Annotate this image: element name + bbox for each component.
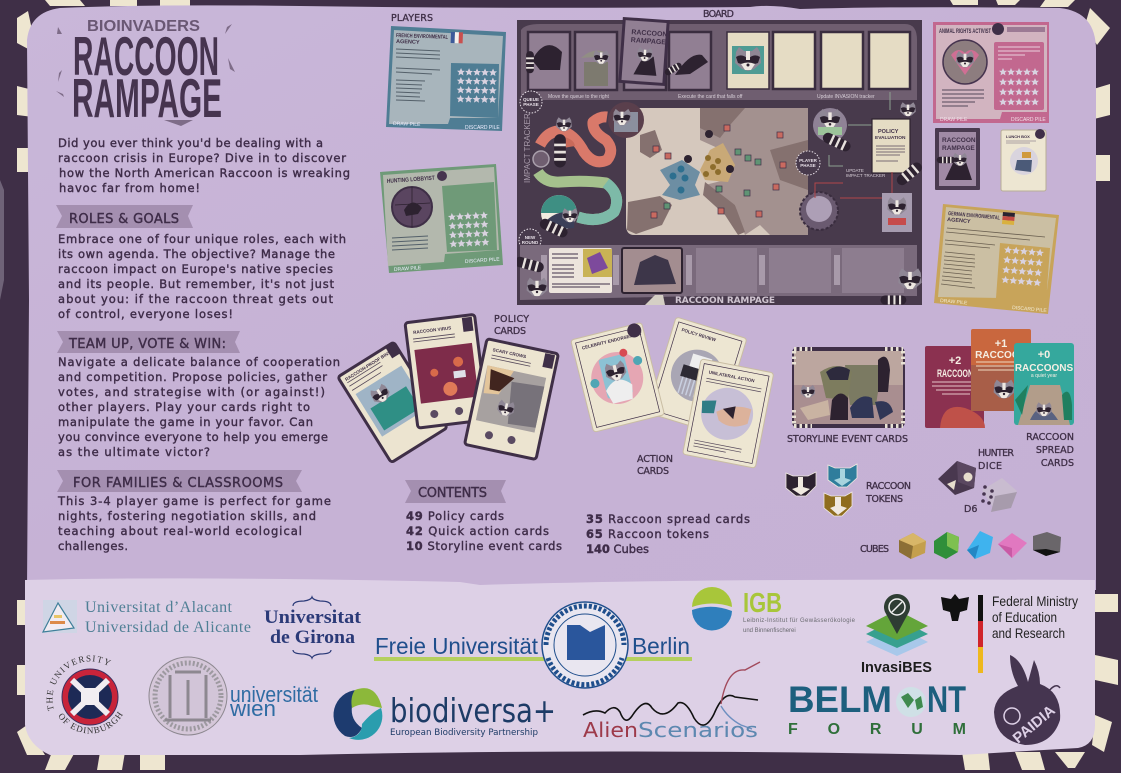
- text block: roles and goals: of control, everyone loses!: [58, 307, 233, 321]
- label: action cards: CARDS: [637, 466, 669, 477]
- board: policy queue strip: [521, 19, 917, 100]
- heading: team up, vote and win: [57, 331, 240, 353]
- logo: Federal Ministry of Education and Research: Federal Ministry: [992, 593, 1078, 609]
- logo: Universitat de Girona: Universitat: [264, 607, 362, 628]
- logo: Paidia: [994, 655, 1060, 747]
- text block: roles and goals: about you: if the raccoon threat gets out: [58, 292, 333, 306]
- player card: Animal Rights Activist: DRAW PILE: [940, 117, 968, 123]
- logo: IGB: Leibniz-Institut für Gewässerökologie: [743, 618, 856, 624]
- card back: Raccoon Rampage: RACCOON: [942, 137, 976, 144]
- text block: introduction: how the North American Raccoon is wreaking: [59, 166, 350, 180]
- player card: Animal Rights Activist: ANIMAL RIGHTS ACTIVIST: [939, 29, 991, 35]
- d6 die: [981, 478, 1017, 512]
- text block: roles and goals: Embrace one of four unique roles, each with: [58, 232, 346, 246]
- player card: German Environmental Agency: [934, 204, 1059, 314]
- logo: University of Vienna seal and wordmark: wien: [229, 696, 276, 721]
- hunter dice: [938, 461, 976, 495]
- action cards group: [570, 317, 774, 468]
- board: policy evaluation and flows: POLICY: [878, 129, 899, 135]
- label: policy cards: CARDS: [494, 326, 526, 337]
- player card: French Environmental Agency: AGENCY: [396, 39, 420, 46]
- spread card: +1: [971, 329, 1031, 411]
- heading: team up, vote and win: TEAM UP, VOTE & WIN:: [68, 337, 226, 352]
- player card: German Environmental Agency: DISCARD PILE: [1012, 305, 1048, 314]
- text block: team up, vote and win: [58, 355, 340, 459]
- heading: contents: [405, 480, 506, 503]
- list: contents right: [586, 512, 750, 556]
- action card: policy review: [647, 317, 747, 434]
- logo: Belmont Forum: [788, 679, 966, 738]
- board: Europe map: [626, 108, 808, 235]
- player card: French Environmental Agency: FRENCH ENVIRONMENTAL: [396, 33, 449, 41]
- logo: Paidia: PAIDIA: [1010, 702, 1059, 747]
- list: contents left: [406, 509, 562, 553]
- policy cards group: [338, 314, 558, 463]
- title logo: RACCOON: [73, 25, 219, 87]
- label: hunter dice: HUNTER: [978, 448, 1014, 459]
- logo: Freie Universität Berlin: Freie Universität: [375, 633, 539, 659]
- text block: for families and classrooms: This 3-4 player game is perfect for game: [57, 494, 331, 508]
- action card: unilateral action: [683, 359, 774, 468]
- storyline event card: [792, 347, 905, 428]
- action card: unilateral action: UNILATERAL ACTION: [708, 370, 755, 383]
- label: policy cards: [494, 314, 529, 337]
- text block: team up, vote and win: Navigate a delicate balance of cooperation: [58, 355, 340, 369]
- policy card: raccoon proof bins: RACCOON-PROOF BINS: [344, 350, 392, 382]
- list: contents right: 35 Raccoon spread cards: [586, 512, 750, 526]
- text block: for families and classrooms: nights, fostering negotiation skills, and: [58, 509, 316, 523]
- heading: for families and classrooms: FOR FAMILIES & CLASSROOMS: [73, 476, 283, 491]
- game board: [517, 19, 922, 306]
- player card: Animal Rights Activist: DISCARD PILE: [1011, 117, 1046, 123]
- spread card: +1: RACCOON: [975, 350, 1027, 361]
- logo: AlienScenarios: [583, 662, 760, 742]
- board: phase badges: PHASE: [523, 102, 539, 107]
- board: phase badges: [519, 91, 820, 251]
- logo: biodiversa+: biodiversa+: [390, 691, 556, 730]
- text block: team up, vote and win: manipulate the game in your favor. Can: [58, 415, 313, 429]
- action card: policy review: POLICY REVIEW: [681, 327, 717, 343]
- list: contents left: 49 Policy cards: [406, 509, 504, 523]
- logo: Federal Ministry of Education and Research: [941, 593, 1078, 673]
- player card: French Environmental Agency: [386, 26, 506, 131]
- logo: Federal Ministry of Education and Research: of Education: [992, 609, 1057, 625]
- list: contents left: 42 Quick action cards: [406, 524, 549, 538]
- logo: Freie Universität Berlin: [374, 602, 692, 688]
- cubes row: [899, 531, 1061, 559]
- label: players: PLAYERS: [391, 13, 433, 24]
- board: policy queue strip: RAMPAGE: [631, 37, 667, 47]
- board: phase badges: NEW: [525, 235, 536, 240]
- logo: Freie Universität Berlin: Berlin: [632, 633, 690, 659]
- spread card: +0: [1014, 343, 1074, 425]
- heading: for families and classrooms: [57, 470, 302, 492]
- text block: roles and goals: its own agenda. The objective? Manage the: [58, 247, 335, 261]
- card back: Raccoon Rampage: RAMPAGE: [942, 145, 975, 152]
- logo: IGB: und Binnenfischerei: [743, 628, 796, 634]
- board: policy evaluation and flows: [800, 92, 917, 232]
- player card: German Environmental Agency: AGENCY: [947, 217, 971, 225]
- spread card: +0: a quiet year: [1031, 373, 1057, 379]
- policy card: raccoon virus: [405, 314, 487, 428]
- board: policy queue strip: Update INVASION tracker: [817, 94, 875, 100]
- board: policy evaluation and flows: EVALUATION: [875, 135, 906, 141]
- label: raccoon tokens: TOKENS: [865, 494, 903, 505]
- logo: biodiversa+: European Biodiversity Partnership: [390, 728, 538, 738]
- label: raccoon tokens: RACCOON: [866, 481, 911, 492]
- heading: contents: CONTENTS: [418, 486, 487, 501]
- list: contents left: 10 Storyline event cards: [406, 539, 562, 553]
- board: policy evaluation and flows: IMPACT TRACKER: [846, 173, 886, 178]
- action card: celebrity endorsement: [570, 321, 665, 432]
- board: policy evaluation and flows: UPDATE: [846, 168, 864, 173]
- logo: InvasiBES: [861, 594, 932, 676]
- list: contents right: 140 Cubes: [586, 542, 649, 556]
- text block: roles and goals: raccoon impact on Europe's native species: [58, 262, 333, 276]
- text block: for families and classrooms: challenges.: [58, 539, 128, 553]
- text block: introduction: raccoon crisis in Europe? Dive in to discover: [58, 151, 346, 165]
- title logo: BIOINVADERS: [87, 18, 200, 35]
- card back: Raccoon Rampage: [935, 128, 980, 190]
- logo: University of Vienna seal and wordmark: [149, 657, 318, 735]
- board: phase badges: PLAYER: [799, 158, 818, 163]
- raccoon tokens: [786, 464, 857, 516]
- player card: German Environmental Agency: DRAW PILE: [940, 298, 968, 306]
- board: storyline strip: [520, 245, 922, 306]
- text block: team up, vote and win: as the ultimate victor?: [58, 445, 210, 459]
- text block: introduction: havoc far from home!: [59, 181, 200, 195]
- label: board: BOARD: [703, 9, 734, 20]
- text block: for families and classrooms: [57, 494, 331, 553]
- logo: InvasiBES: InvasiBES: [861, 659, 932, 676]
- logo: AlienScenarios: Alien: [583, 718, 638, 742]
- board: phase badges: PHASE: [800, 163, 816, 168]
- label: storyline event cards: STORYLINE EVENT CARDS: [787, 434, 908, 445]
- raccoon spread cards: [925, 329, 1074, 428]
- label: d6: D6: [964, 504, 977, 515]
- board: phase badges: QUEUE: [523, 97, 539, 102]
- logo: Universitat d'Alacant: Universitat d’Alacant: [85, 599, 233, 616]
- label: action cards: ACTION: [637, 454, 673, 465]
- label: cubes: CUBES: [860, 544, 889, 555]
- label: raccoon spread cards: RACCOON: [1026, 432, 1074, 443]
- board: impact tracker path: IMPACT TRACKER: [523, 113, 532, 183]
- text block: introduction: [58, 136, 350, 195]
- spread card: +2: +2: [949, 355, 961, 367]
- title logo: RAMPAGE: [72, 67, 222, 129]
- title logo: [56, 18, 235, 129]
- player card: Hunting Lobbyist: HUNTING LOBBYIST: [387, 176, 435, 185]
- text block: roles and goals: and its people. But remember, it's not just: [58, 277, 334, 291]
- text block: introduction: Did you ever think you'd be dealing with a: [58, 136, 323, 150]
- label: hunter dice: DICE: [978, 461, 1002, 472]
- spread card: +1: +1: [995, 338, 1007, 350]
- text block: team up, vote and win: and competition. Propose policies, gather: [58, 370, 327, 384]
- player card: French Environmental Agency: DRAW PILE: [393, 121, 421, 128]
- logo: Universitat d'Alacant: Universidad de Alicante: [85, 619, 251, 636]
- policy card: scary crows: SCARY CROWS: [492, 347, 527, 359]
- panel: footer sponsors: [25, 578, 1095, 755]
- logo: IGB: [692, 587, 856, 634]
- card: small action card: [1001, 129, 1046, 191]
- player card: Hunting Lobbyist: [380, 164, 503, 273]
- spread card: +2: [925, 346, 985, 428]
- logo: University of Edinburgh: OF EDINBURGH: [59, 711, 123, 734]
- label: action cards: [637, 454, 673, 477]
- logo: Belmont Forum: NT: [927, 679, 966, 720]
- board: policy queue strip: Move the queue to the right: [548, 94, 609, 100]
- player card: Animal Rights Activist: [933, 22, 1049, 123]
- label: raccoon spread cards: CARDS: [1041, 458, 1074, 469]
- spread card: +0: RACCOONS: [1015, 363, 1073, 374]
- text block: roles and goals: [58, 232, 346, 321]
- logo: Universitat de Girona: [264, 597, 362, 658]
- board: policy queue strip: RACCOON: [631, 29, 668, 39]
- board: policy queue strip: Execute the card that falls off: [678, 94, 743, 100]
- text block: for families and classrooms: teaching about real-world ecological: [58, 524, 302, 538]
- player card: Hunting Lobbyist: DRAW PILE: [394, 265, 422, 273]
- text block: team up, vote and win: you convince everyone to help you emerge: [58, 430, 328, 444]
- label: hunter dice: [978, 448, 1014, 472]
- logo: University of Edinburgh: [46, 656, 123, 734]
- action card: celebrity endorsement: CELEBRITY ENDORSEMENT: [581, 331, 643, 351]
- policy card: raccoon proof bins: [338, 342, 447, 463]
- logo: Universitat d'Alacant: [43, 599, 251, 636]
- heading: roles and goals: [56, 205, 193, 228]
- label: raccoon spread cards: [1026, 432, 1074, 469]
- board: phase badges: ROUND: [522, 240, 539, 245]
- spread card: +0: +0: [1038, 349, 1050, 361]
- text block: team up, vote and win: votes, and strategise with (or against!): [58, 385, 325, 399]
- spread card: +2: RACCOON: [937, 368, 973, 380]
- panel: main lilac: [27, 5, 1096, 590]
- label: raccoon tokens: [865, 481, 911, 505]
- logo: IGB: IGB: [743, 587, 782, 618]
- board: impact tracker path: [523, 113, 617, 220]
- logo: Universitat de Girona: de Girona: [270, 627, 356, 648]
- logo: AlienScenarios: Scenarios: [638, 718, 758, 742]
- logo: Federal Ministry of Education and Research: and Research: [992, 625, 1065, 641]
- heading: roles and goals: ROLES & GOALS: [69, 212, 179, 227]
- logo: University of Vienna seal and wordmark: universität: [230, 682, 318, 707]
- text block: team up, vote and win: other players. Play your cards right to: [58, 400, 310, 414]
- card: small action card: LUNCH BOX: [1006, 134, 1030, 139]
- player card: German Environmental Agency: GERMAN ENVIRONMENTAL: [948, 211, 1001, 222]
- logo: University of Edinburgh: THE UNIVERSITY: [46, 656, 112, 712]
- player card: Hunting Lobbyist: DISCARD PILE: [465, 257, 500, 265]
- policy card: scary crows: [465, 339, 558, 460]
- list: contents right: 65 Raccoon tokens: [586, 527, 709, 541]
- logo: Belmont Forum: BELM: [788, 679, 892, 720]
- logo: Belmont Forum: FORUM: [788, 721, 966, 738]
- board: storyline strip: RACCOON RAMPAGE: [675, 296, 775, 306]
- board: tracker raccoons: [541, 102, 644, 232]
- label: policy cards: POLICY: [494, 314, 529, 325]
- label: raccoon spread cards: SPREAD: [1036, 445, 1074, 456]
- player card: French Environmental Agency: DISCARD PILE: [465, 125, 500, 131]
- logo: biodiversa+: [333, 688, 556, 740]
- policy card: raccoon virus: RACCOON VIRUS: [413, 325, 452, 335]
